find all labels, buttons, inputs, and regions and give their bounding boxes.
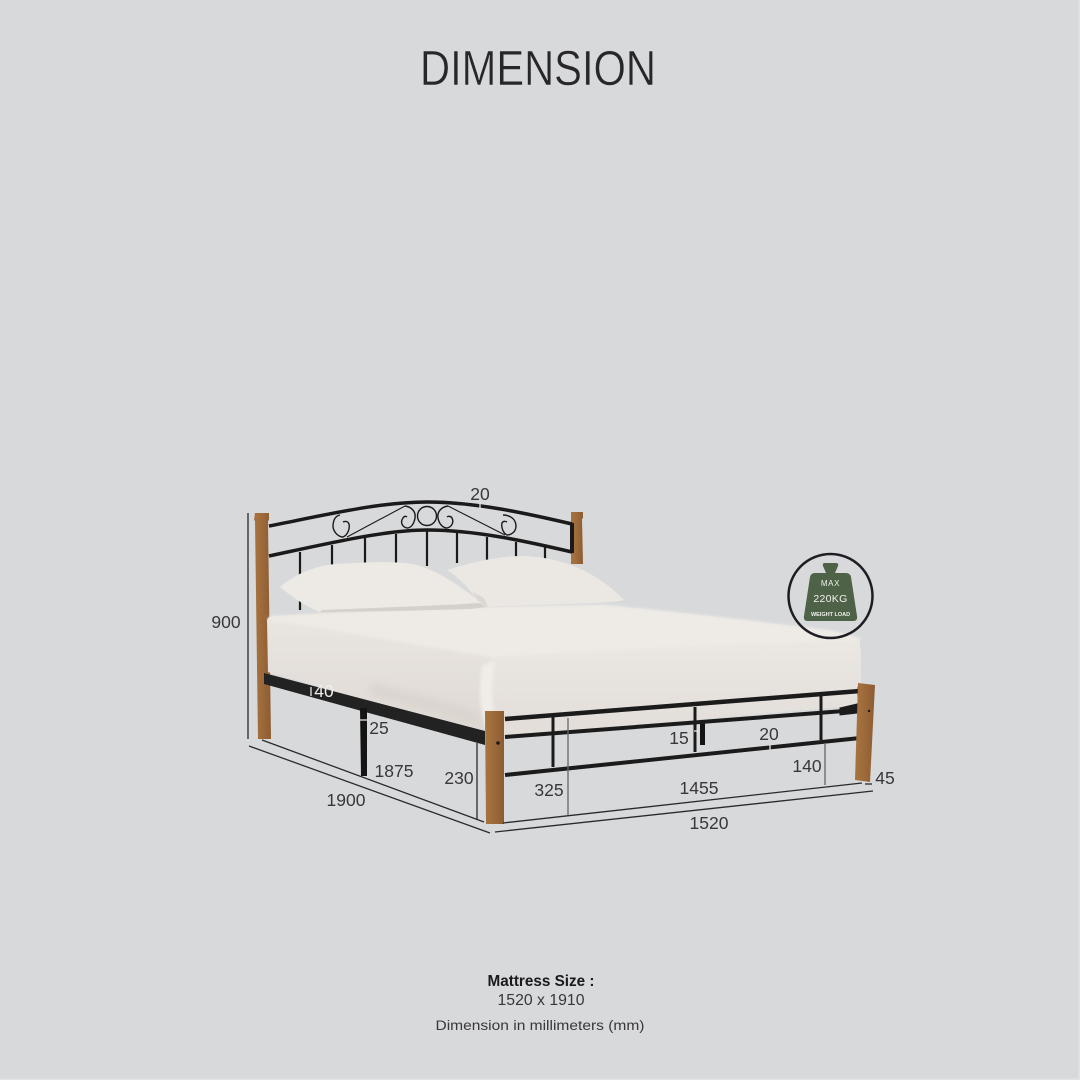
dimension labels: 25 (369, 718, 389, 738)
mattress size note: 1520 x 1910 (498, 992, 585, 1009)
dimension labels: 230 (444, 768, 474, 788)
dimension labels: 45 (875, 768, 895, 788)
mattress (267, 605, 861, 737)
dimension labels: 325 (534, 780, 564, 800)
mattress size note: Mattress Size : (488, 973, 594, 990)
bed illustration (254, 502, 875, 824)
right front post (855, 683, 875, 782)
side rail (264, 673, 485, 745)
right pillow (447, 556, 624, 607)
mattress size note: Dimension in millimeters (mm) (436, 1018, 644, 1033)
max weight badge: WEIGHT LOAD (811, 612, 850, 618)
dimension labels (211, 484, 895, 833)
right rear post (571, 512, 583, 564)
dimension labels: 900 (211, 612, 241, 632)
mattress top face (268, 605, 860, 657)
max weight badge: 220KG (813, 593, 848, 605)
max weight badge: MAX (821, 579, 840, 588)
centre leg (360, 708, 367, 776)
icon: weight (804, 563, 857, 621)
dimension lines (248, 503, 873, 833)
mattress front face (483, 638, 860, 737)
dimension labels: 1900 (327, 790, 366, 810)
dimension labels: 20 (470, 484, 490, 504)
dimension labels: 1875 (375, 761, 413, 781)
mattress left face (268, 620, 493, 733)
dimension labels: 1455 (680, 778, 718, 798)
left front post (485, 711, 504, 824)
mattress size note (436, 973, 644, 1033)
left rear post (254, 513, 271, 739)
dimension labels: 15 (669, 728, 689, 748)
dimension labels: 1520 (690, 813, 729, 833)
dimension labels: 40 (314, 681, 334, 701)
dimension labels: 20 (759, 724, 779, 744)
dimension labels: 140 (792, 756, 822, 776)
title: DIMENSION (420, 42, 656, 96)
max weight badge (788, 554, 872, 638)
footboard metalwork (505, 688, 860, 775)
small rear leg (700, 723, 705, 745)
headboard metalwork (269, 502, 572, 610)
left pillow (280, 562, 487, 612)
